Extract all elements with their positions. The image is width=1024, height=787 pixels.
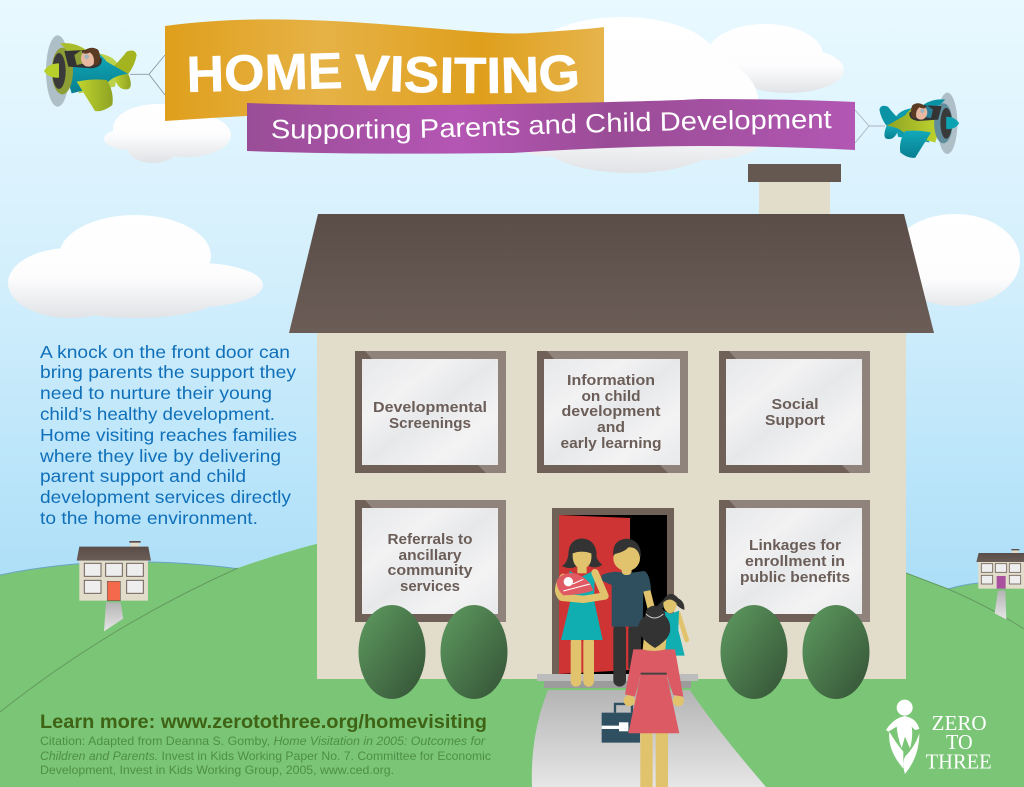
window: Information on child development and early learning: on child — [582, 388, 640, 405]
citation — [40, 734, 491, 777]
window: Referrals to ancillary community services: community — [388, 562, 473, 579]
bushes — [358, 605, 870, 699]
window: Referrals to ancillary community services: ancillary — [398, 547, 462, 564]
intro paragraph: where they live by delivering — [39, 446, 281, 466]
plane: right — [879, 93, 959, 158]
window: Social Support: Social — [772, 396, 818, 413]
intro paragraph: to the home environment. — [40, 508, 258, 528]
intro paragraph: development services directly — [40, 487, 291, 507]
plane tow lines: left — [130, 55, 165, 95]
window: Linkages for enrollment in public benefits: enrollment in — [745, 553, 845, 570]
window: Information on child development and early learning — [537, 351, 688, 473]
plane tow lines: right — [855, 110, 885, 143]
window: Information on child development and early learning: development — [562, 403, 660, 420]
intro paragraph: child’s healthy development. — [40, 404, 275, 424]
citation: Development, Invest in Kids Working Group, 2005, www.ced.org. — [40, 763, 394, 777]
intro paragraph: parent support and child — [40, 466, 246, 486]
mother holding baby — [557, 538, 605, 687]
chimney — [748, 164, 841, 215]
window: Information on child development and early learning: and — [597, 419, 625, 436]
family and home visitor — [557, 538, 687, 787]
subtitle banner — [247, 99, 855, 154]
house — [289, 164, 934, 679]
father — [602, 539, 653, 687]
window: Linkages for enrollment in public benefits: Linkages for — [749, 537, 841, 554]
subtitle banner: Supporting Parents and Child Development — [272, 110, 832, 144]
window: Social Support — [719, 351, 870, 473]
learn more link: Learn more: www.zerotothree.org/homevisiting — [40, 711, 487, 733]
window: Linkages for enrollment in public benefits: public benefits — [740, 569, 850, 586]
citation: Citation: Adapted from Deanna S. Gomby, Home Visitation in 2005: Outcomes for — [40, 734, 486, 748]
window: Developmental Screenings: Developmental — [373, 399, 487, 416]
window: Information on child development and early learning: early learning — [560, 435, 662, 452]
briefcase — [602, 704, 640, 743]
intro paragraph: Home visiting reaches families — [40, 425, 297, 445]
window: Information on child development and early learning: Information — [567, 372, 655, 389]
window: Referrals to ancillary community services — [355, 500, 506, 622]
hills — [0, 515, 1024, 787]
Zero to Three logo — [886, 700, 992, 774]
title banner: HOME — [189, 52, 342, 92]
cloud: top right — [707, 24, 844, 93]
cloud: left — [8, 215, 263, 318]
Zero to Three logo: THREE — [926, 749, 992, 773]
daughter — [657, 594, 687, 656]
intro paragraph: bring parents the support they — [40, 362, 296, 382]
home visitor — [624, 606, 684, 787]
window: Developmental Screenings: Screenings — [389, 415, 471, 432]
roof — [289, 214, 934, 333]
house body — [317, 333, 906, 679]
window: Referrals to ancillary community services: Referrals to — [388, 531, 472, 548]
window: Referrals to ancillary community services: services — [400, 578, 460, 595]
intro paragraph — [39, 342, 297, 528]
small house: left — [77, 541, 151, 631]
cloud: top centre — [510, 17, 763, 173]
title banner: VISITING — [355, 54, 578, 94]
front walkway — [532, 690, 766, 787]
small house: right — [976, 549, 1024, 619]
intro paragraph: need to nurture their young — [40, 383, 272, 403]
cloud: right behind roof — [890, 214, 1020, 306]
window: Social Support: Support — [765, 412, 825, 429]
title banner — [165, 19, 604, 121]
intro paragraph: A knock on the front door can — [40, 342, 290, 362]
window: Developmental Screenings — [355, 351, 506, 473]
Zero to Three logo: ZERO — [932, 711, 987, 735]
window: Linkages for enrollment in public benefits — [719, 500, 870, 622]
citation: Children and Parents. Invest in Kids Working Paper No. 7. Committee for Economic — [40, 749, 491, 763]
plane: left — [44, 35, 137, 111]
cloud: lower left of banner — [104, 104, 231, 163]
Zero to Three logo: TO — [946, 730, 973, 754]
front door and steps — [537, 508, 698, 688]
